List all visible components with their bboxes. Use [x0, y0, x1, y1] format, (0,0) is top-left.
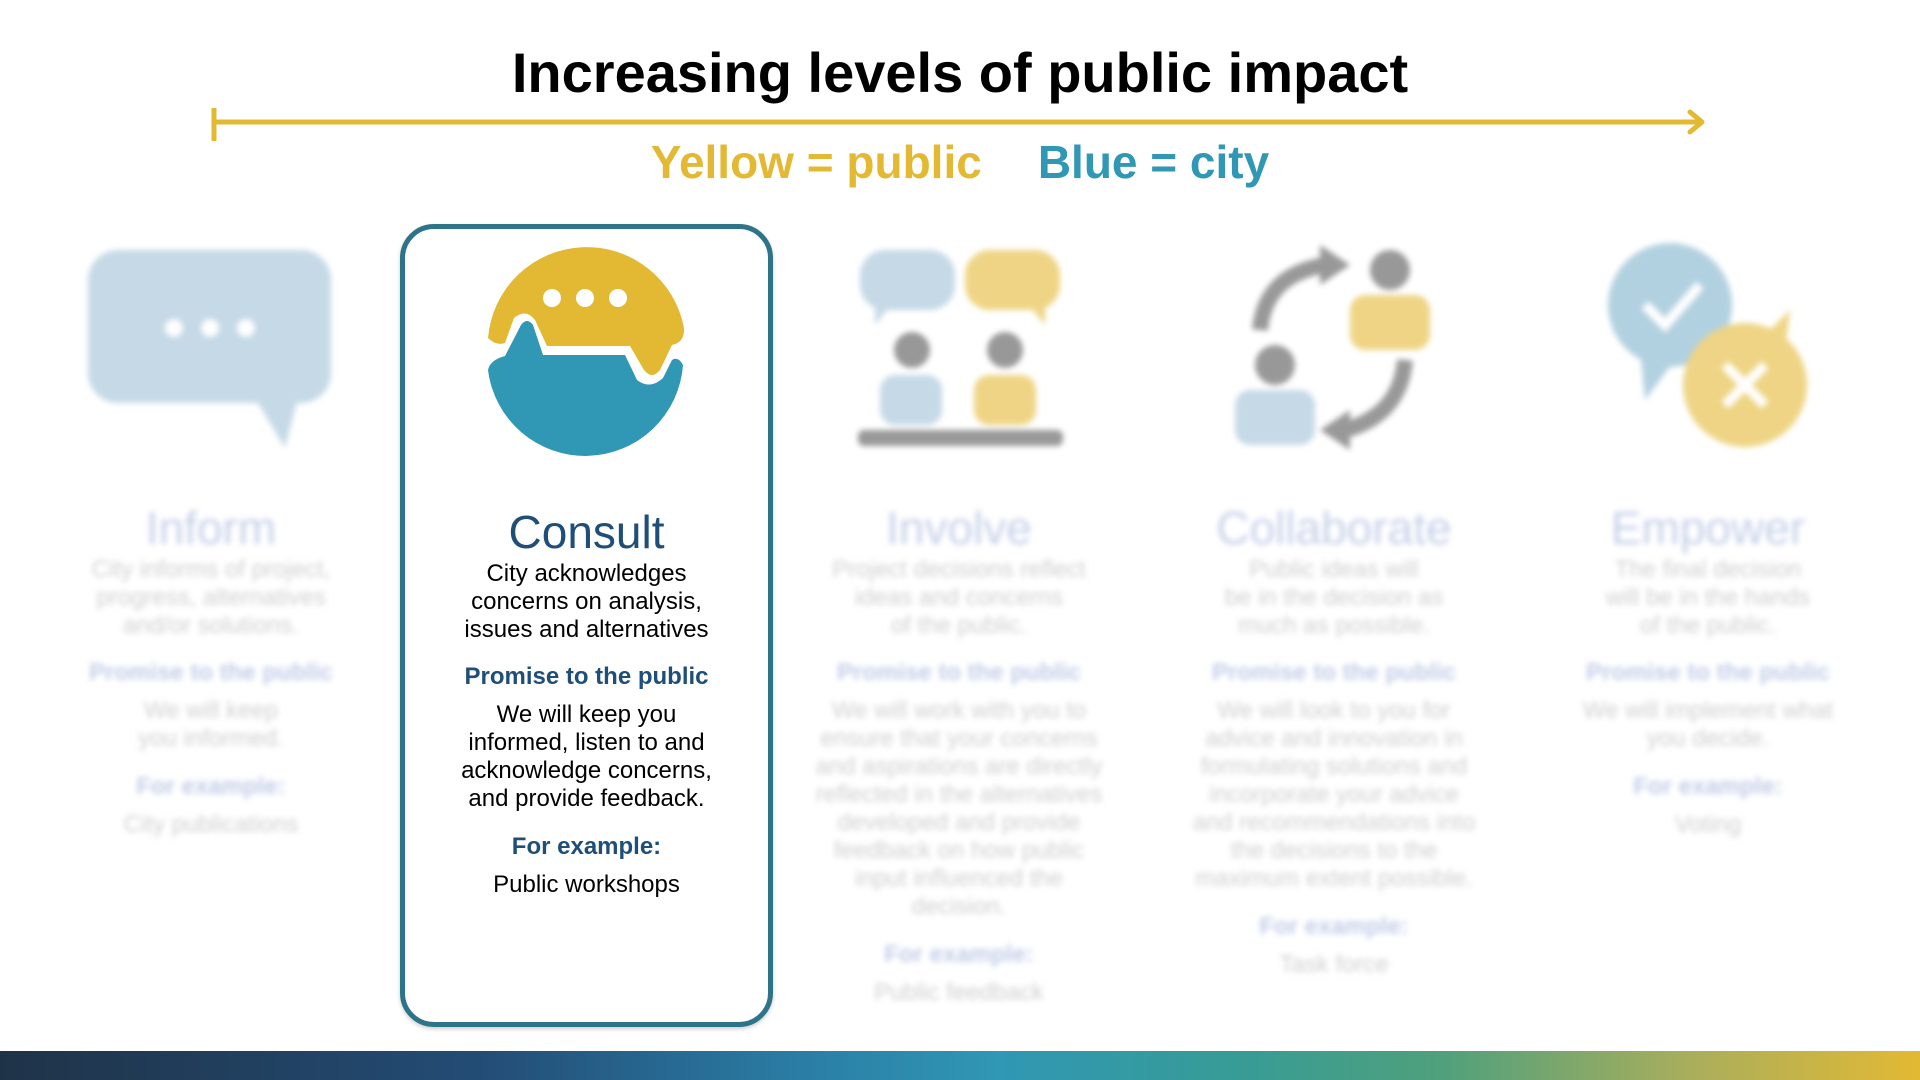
consult text: concerns on analysis,: [471, 588, 702, 615]
panel: collaborate: We will look to you for: [1218, 697, 1450, 724]
panel: involve: feedback on how public: [834, 837, 1084, 864]
panel: collaborate: maximum extent possible.: [1195, 865, 1473, 892]
panel: collaborate: incorporate your advice: [1209, 781, 1459, 808]
panel: collaborate: and recommendations into: [1193, 809, 1475, 836]
panel: involve: ideas and concerns: [855, 584, 1063, 611]
panel: involve: input influenced the: [855, 865, 1063, 892]
icon: consult speech bubble: [488, 247, 684, 456]
panel: collaborate: be in the decision as: [1225, 584, 1443, 611]
consult text: We will keep you: [497, 701, 676, 728]
consult text: issues and alternatives: [464, 616, 709, 643]
panel: involve: of the public.: [891, 612, 1027, 639]
panel: empower: For example:: [1633, 773, 1783, 800]
consult text: and provide feedback.: [468, 785, 705, 812]
panel: collaborate: Public ideas will: [1249, 556, 1419, 583]
panel: involve: Public feedback: [874, 979, 1044, 1006]
panel: empower: The final decision: [1615, 556, 1801, 583]
consult text: For example:: [512, 833, 661, 860]
consult text: Promise to the public: [464, 663, 709, 690]
panel: involve: developed and provide: [838, 809, 1080, 836]
panel: collaborate: formulating solutions and: [1201, 753, 1467, 780]
panel: empower: of the public.: [1640, 612, 1776, 639]
consult text: City acknowledges: [486, 560, 687, 587]
icon: collaborate cycle: [1232, 244, 1434, 452]
panel: inform: City informs of project,: [92, 556, 330, 583]
panel: inform: progress, alternatives: [96, 584, 326, 611]
panel: collaborate: Promise to the public: [1212, 659, 1456, 686]
panel: empower: We will implement what: [1583, 697, 1833, 724]
panel: inform: you informed.: [138, 725, 284, 752]
panel: empower: [1582, 502, 1834, 838]
consult text: [461, 506, 712, 898]
title: Increasing levels of public impact: [512, 41, 1408, 104]
panel: collaborate: advice and innovation in: [1205, 725, 1463, 752]
panel: involve: reflected in the alternatives: [816, 781, 1102, 808]
panel: inform: We will keep: [144, 697, 278, 724]
panel: empower: Promise to the public: [1586, 659, 1830, 686]
panel: involve: decision.: [912, 893, 1006, 920]
panel: empower: Empower: [1611, 502, 1805, 554]
panel: involve: Involve: [886, 502, 1032, 554]
panel: involve: Promise to the public: [837, 659, 1081, 686]
panel: collaborate: [1192, 502, 1476, 978]
consult text: informed, listen to and: [468, 729, 705, 756]
consult text: acknowledge concerns,: [461, 757, 712, 784]
panel: collaborate: Collaborate: [1216, 502, 1452, 554]
panel: inform: For example:: [136, 773, 286, 800]
panel: inform: City publications: [124, 811, 298, 838]
icon: involve people: [854, 246, 1066, 450]
panel: involve: [815, 502, 1102, 1006]
panel: involve: and aspirations are directly: [816, 753, 1102, 780]
icon: inform speech bubble: [85, 247, 334, 448]
panel: inform: and/or solutions.: [123, 612, 299, 639]
panel: involve: We will work with you to: [832, 697, 1086, 724]
panel: collaborate: the decisions to the: [1231, 837, 1437, 864]
legend: Yellow = public Blue = city: [651, 136, 1269, 188]
panel: inform: Promise to the public: [89, 659, 333, 686]
panel: collaborate: much as possible.: [1238, 612, 1430, 639]
consult text: Consult: [509, 506, 664, 558]
panel: empower: will be in the hands: [1606, 584, 1810, 611]
panel: collaborate: For example:: [1259, 913, 1409, 940]
panel: inform: [88, 502, 333, 838]
panel: empower: you decide.: [1647, 725, 1769, 752]
consult text: Public workshops: [493, 871, 680, 898]
arrow: impact scale: [212, 108, 1704, 141]
bottom gradient bar: [0, 1051, 1920, 1080]
panel: involve: For example:: [884, 941, 1034, 968]
panel: inform: Inform: [146, 502, 276, 554]
panel: involve: ensure that your concerns: [820, 725, 1098, 752]
panel: collaborate: Task force: [1279, 951, 1389, 978]
panel: empower: Voting: [1675, 811, 1741, 838]
panel: consult card: [400, 224, 773, 1027]
panel: involve: Project decisions reflect: [832, 556, 1086, 583]
icon: empower check and x: [1604, 240, 1811, 451]
